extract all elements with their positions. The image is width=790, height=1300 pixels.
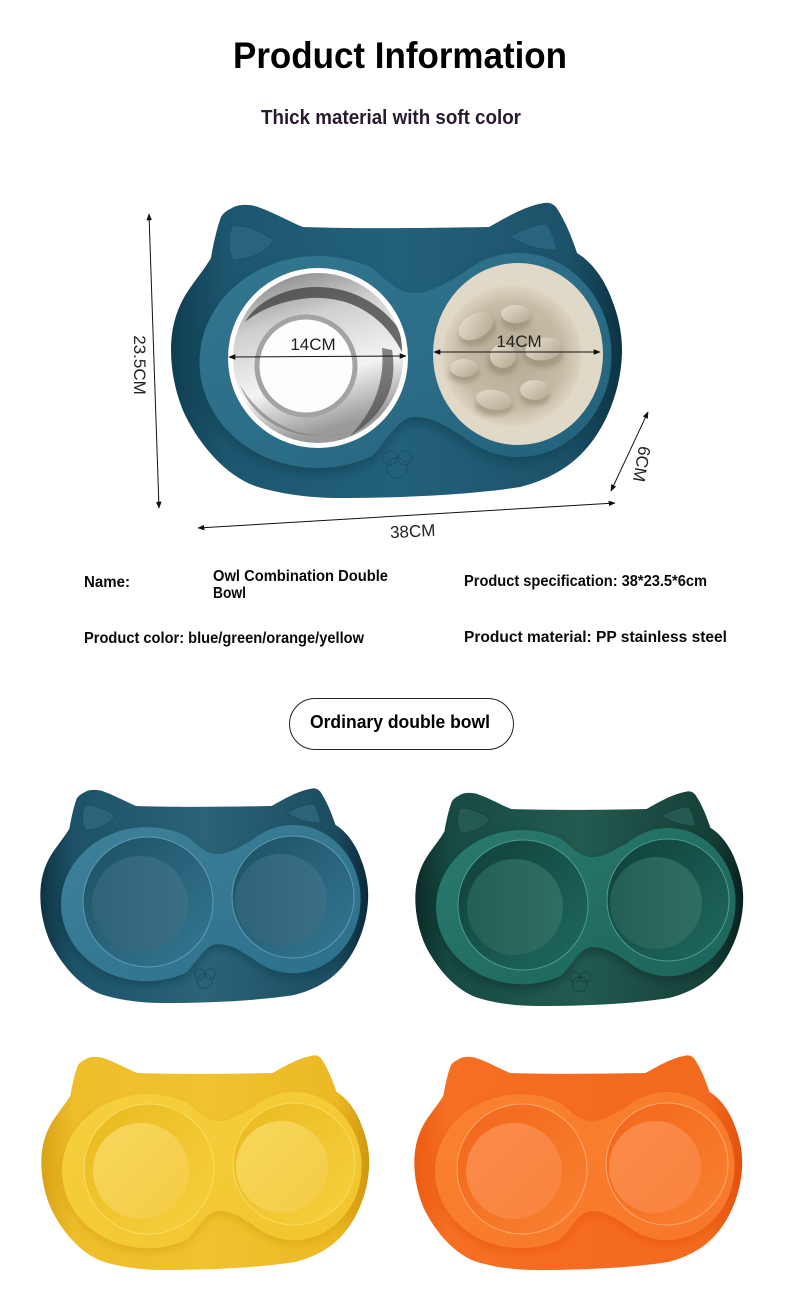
right diameter label: 14CM — [496, 332, 542, 351]
height label: 23.5CM — [130, 335, 149, 395]
name value second line: Bowl — [213, 585, 246, 602]
depth label: 6CM — [629, 445, 654, 483]
green bowl — [415, 791, 743, 1006]
feeder bump shadows — [449, 309, 563, 416]
paw logo — [383, 451, 412, 478]
width label: 38CM — [390, 521, 436, 542]
product color: Product color: blue/green/orange/yellow — [84, 630, 365, 647]
blue bowl — [40, 788, 368, 1003]
name value: Owl Combination Double — [213, 568, 388, 585]
pill heading — [290, 698, 514, 750]
product material: Product material: PP stainless steel — [464, 629, 727, 646]
slow feeder bowl — [433, 263, 603, 445]
orange bowl — [414, 1055, 742, 1270]
bowl base plate — [171, 203, 622, 498]
yellow bowl — [41, 1055, 369, 1270]
main product image: blue owl double bowl — [171, 203, 622, 498]
raised figure-eight surface — [199, 253, 612, 468]
left diameter label: 14CM — [290, 335, 336, 354]
product specification: Product specification: 38*23.5*6cm — [464, 573, 707, 590]
ear insets — [229, 224, 556, 260]
feeder bumps — [450, 305, 565, 413]
dimension arrow: width — [198, 503, 615, 542]
product details — [84, 568, 727, 647]
title: Product Information — [233, 35, 567, 76]
raised figure-eight surface shadow — [199, 259, 612, 474]
dimension arrow: height — [130, 214, 159, 508]
name label: Name: — [84, 574, 130, 591]
steel bowl — [228, 268, 408, 448]
subtitle: Thick material with soft color — [261, 107, 521, 129]
dimension arrow: depth — [611, 412, 654, 491]
pill heading: Ordinary double bowl — [310, 712, 490, 732]
